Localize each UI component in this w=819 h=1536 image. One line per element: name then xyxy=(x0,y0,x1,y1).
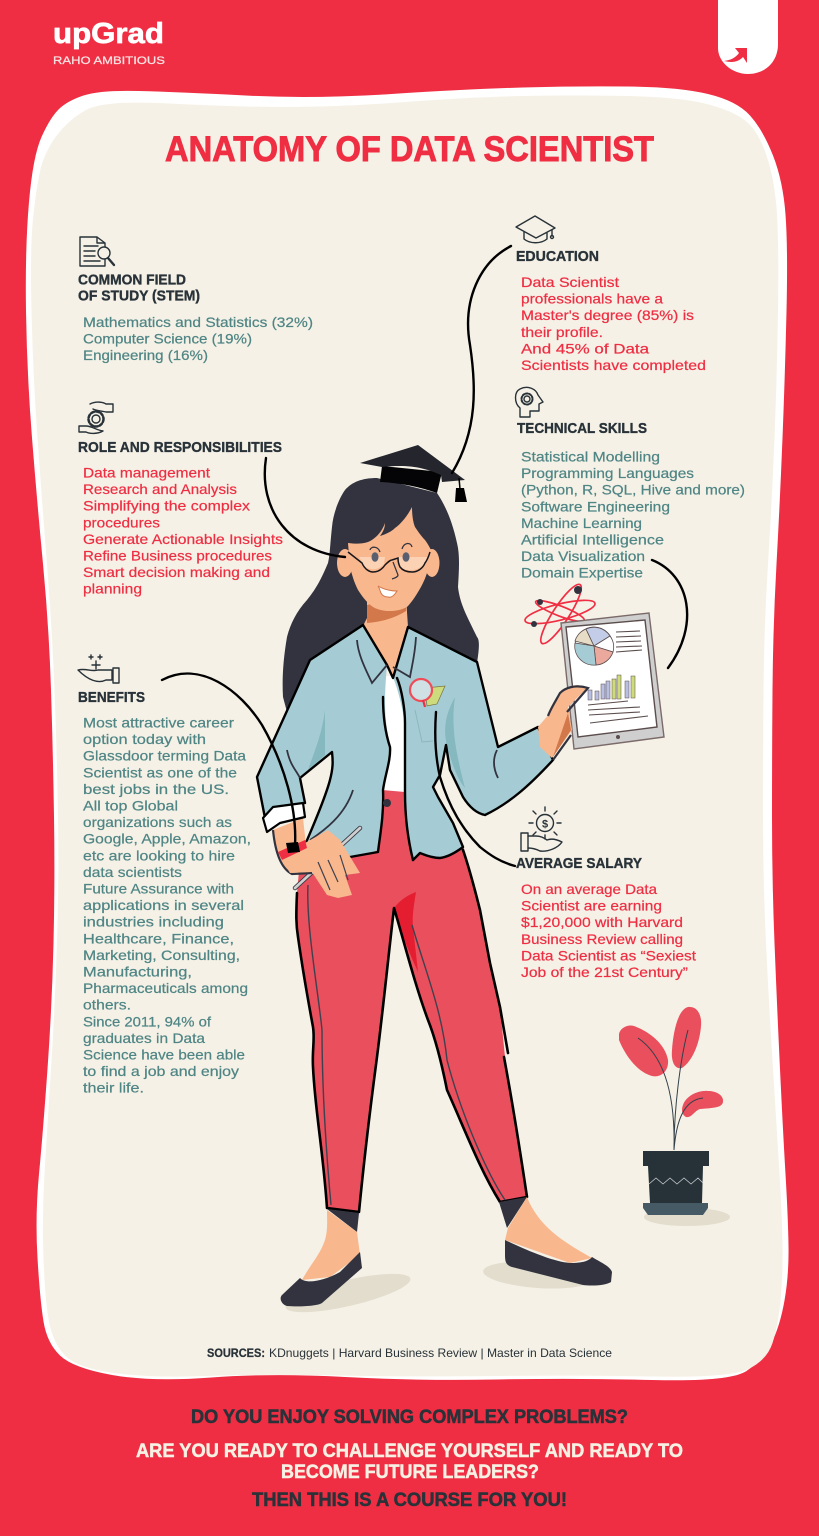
icon: hand with dollar coin: $ xyxy=(542,818,548,830)
jacket xyxy=(257,625,553,860)
eyes and brows xyxy=(370,543,412,562)
section: common field of study: OF STUDY (STEM) xyxy=(78,288,200,304)
collar xyxy=(287,637,498,840)
text: benefits: industries including xyxy=(83,914,224,930)
text: benefits: Glassdoor terming Data xyxy=(83,748,246,764)
text: benefits: best jobs in the US. xyxy=(83,781,229,797)
text: benefits: applications in several xyxy=(83,897,244,913)
left hand and cuff xyxy=(263,803,360,898)
logo: upGrad: upGrad xyxy=(53,18,164,50)
pot xyxy=(643,1151,709,1166)
panel: main card xyxy=(26,86,789,1380)
text: responsibilities: Generate Actionable Insights xyxy=(83,531,283,547)
text: skills: Domain Expertise xyxy=(521,565,643,581)
text: salary: $1,20,000 with Harvard xyxy=(521,914,683,930)
mouth xyxy=(378,586,397,597)
text: responsibilities: Smart decision making and xyxy=(83,564,270,580)
icon: document with magnifier xyxy=(80,237,114,266)
call to action: DO YOU ENJOY SOLVING COMPLEX PROBLEMS? xyxy=(191,1407,628,1428)
text: benefits: Since 2011, 94% of xyxy=(83,1013,211,1029)
pocket xyxy=(415,710,433,742)
bracelet xyxy=(278,840,307,860)
text: skills: Data Visualization xyxy=(521,548,645,564)
hand xyxy=(282,830,360,898)
text: benefits: Science have been able xyxy=(83,1046,245,1062)
nose xyxy=(392,562,398,579)
ears xyxy=(337,549,440,577)
section: technical skills xyxy=(517,421,745,581)
icon: plant xyxy=(619,1007,730,1226)
right hand holding tablet xyxy=(538,685,588,760)
section: education: EDUCATION xyxy=(516,249,599,265)
feet xyxy=(302,1197,592,1280)
section: average salary: AVERAGE SALARY xyxy=(516,856,642,872)
section: benefits: BENEFITS xyxy=(78,690,145,706)
sources: KDnuggets | Harvard Business Review | Master in Data Science xyxy=(269,1346,612,1360)
icon: graduation cap outline xyxy=(516,216,555,243)
text: skills xyxy=(521,448,745,581)
section: average salary xyxy=(516,856,696,980)
text: skills: Software Engineering xyxy=(521,498,670,514)
text: responsibilities: Data management xyxy=(83,464,210,480)
text: benefits: Future Assurance with xyxy=(83,880,234,896)
text: salary: Data Scientist as “Sexiest xyxy=(521,947,696,963)
text: education: And 45% of Data xyxy=(521,340,649,356)
glasses highlight xyxy=(359,557,427,570)
connector curves xyxy=(162,246,687,866)
section: technical skills: TECHNICAL SKILLS xyxy=(517,421,647,437)
jacket outline xyxy=(257,625,553,860)
icon: bookmark with arrow xyxy=(718,0,778,74)
socks xyxy=(327,1197,527,1232)
shirt xyxy=(382,676,405,792)
illustration: data scientist figure xyxy=(257,445,612,1320)
text: education: Scientists have completed xyxy=(521,357,706,373)
text: responsibilities: procedures xyxy=(83,514,160,530)
trouser outlines xyxy=(296,850,527,1212)
fingers xyxy=(318,855,348,890)
title: ANATOMY OF DATA SCIENTIST xyxy=(165,130,654,169)
leaves xyxy=(619,1007,723,1117)
text: skills: (Python, R, SQL, Hive and more) xyxy=(521,482,745,498)
text: fields: Engineering (16%) xyxy=(83,347,208,363)
icon: head with gear xyxy=(516,387,543,417)
button xyxy=(383,799,391,807)
text: benefits: their life. xyxy=(83,1080,144,1096)
text: salary: Business Review calling xyxy=(521,931,683,947)
text lines xyxy=(588,631,648,723)
pie chart xyxy=(575,627,614,665)
shoes xyxy=(281,1240,612,1306)
text: skills: Machine Learning xyxy=(521,515,642,531)
stems xyxy=(638,1030,703,1150)
section: role and responsibilities: ROLE AND RESPONSIBILITIES xyxy=(78,440,282,456)
text: skills: Artificial Intelligence xyxy=(521,532,664,548)
call to action xyxy=(136,1407,683,1511)
call to action: BECOME FUTURE LEADERS? xyxy=(281,1462,539,1483)
shoe shadows xyxy=(283,1258,594,1320)
text: responsibilities xyxy=(83,464,283,597)
text: responsibilities: Refine Business procedures xyxy=(83,548,272,564)
text: benefits: organizations such as xyxy=(83,814,232,830)
text: education: Master's degree (85%) is xyxy=(521,307,694,323)
section: benefits xyxy=(78,690,251,1096)
text: salary: Job of the 21st Century” xyxy=(521,964,688,980)
text: responsibilities: Research and Analysis xyxy=(83,481,237,497)
section: education xyxy=(516,249,706,373)
text: salary: On an average Data xyxy=(521,881,657,897)
neck xyxy=(362,597,408,680)
text: benefits: Healthcare, Finance, xyxy=(83,930,234,946)
tablet with charts xyxy=(561,613,664,749)
text: benefits: Most attractive career xyxy=(83,714,234,730)
section: common field of study xyxy=(78,272,313,363)
text: benefits: to find a job and enjoy xyxy=(83,1063,239,1079)
jacket shading xyxy=(308,697,465,788)
text: skills: Programming Languages xyxy=(521,465,694,481)
trouser inner shade xyxy=(394,892,418,972)
section: common field of study: COMMON FIELD xyxy=(78,272,186,288)
text: skills: Statistical Modelling xyxy=(521,448,660,464)
text: education: professionals have a xyxy=(521,291,663,307)
trousers xyxy=(296,788,527,1212)
badge xyxy=(410,679,445,707)
text: benefits: All top Global xyxy=(83,798,178,814)
text: salary xyxy=(521,881,696,980)
icon: atom xyxy=(523,580,597,648)
text: responsibilities: Simplifying the complex xyxy=(83,498,250,514)
text: benefits: graduates in Data xyxy=(83,1030,205,1046)
text: education xyxy=(521,274,706,373)
graduation cap xyxy=(360,445,467,502)
bar chart xyxy=(588,675,635,700)
pen xyxy=(295,828,360,888)
text: benefits: Pharmaceuticals among xyxy=(83,980,248,996)
text: fields: Computer Science (19%) xyxy=(83,331,252,347)
text: benefits: others. xyxy=(83,997,131,1013)
text: benefits: etc are looking to hire xyxy=(83,847,235,863)
text: benefits: Scientist as one of the xyxy=(83,764,237,780)
text: benefits: Google, Apple, Amazon, xyxy=(83,831,251,847)
icon: hand with dollar coin xyxy=(521,807,562,851)
glasses xyxy=(348,552,430,572)
call to action: ARE YOU READY TO CHALLENGE YOURSELF AND READY TO xyxy=(136,1441,683,1462)
text: benefits: data scientists xyxy=(83,864,182,880)
text: education: their profile. xyxy=(521,324,603,340)
text: fields: Mathematics and Statistics (32%) xyxy=(83,314,313,330)
hair xyxy=(283,478,479,712)
forearm xyxy=(273,818,306,873)
text: benefits: Manufacturing, xyxy=(83,964,192,980)
text: salary: Scientist are earning xyxy=(521,898,662,914)
cuff xyxy=(263,803,305,832)
text: benefits: option today with xyxy=(83,731,206,747)
text: education: Data Scientist xyxy=(521,274,619,290)
text: responsibilities: planning xyxy=(83,581,142,597)
call to action: THEN THIS IS A COURSE FOR YOU! xyxy=(252,1490,567,1511)
trouser stripes xyxy=(308,885,505,1205)
logo: upGrad: RAHO AMBITIOUS xyxy=(53,55,165,67)
sources: SOURCES: xyxy=(207,1346,265,1360)
section: role and responsibilities xyxy=(78,440,283,597)
icon: hand with sparkles xyxy=(78,655,119,683)
text: fields xyxy=(83,314,313,363)
text: benefits: Marketing, Consulting, xyxy=(83,947,240,963)
logo: upGrad xyxy=(53,18,165,67)
icon: gear with hands xyxy=(79,402,113,433)
text: benefits xyxy=(83,714,251,1096)
face xyxy=(348,507,432,611)
